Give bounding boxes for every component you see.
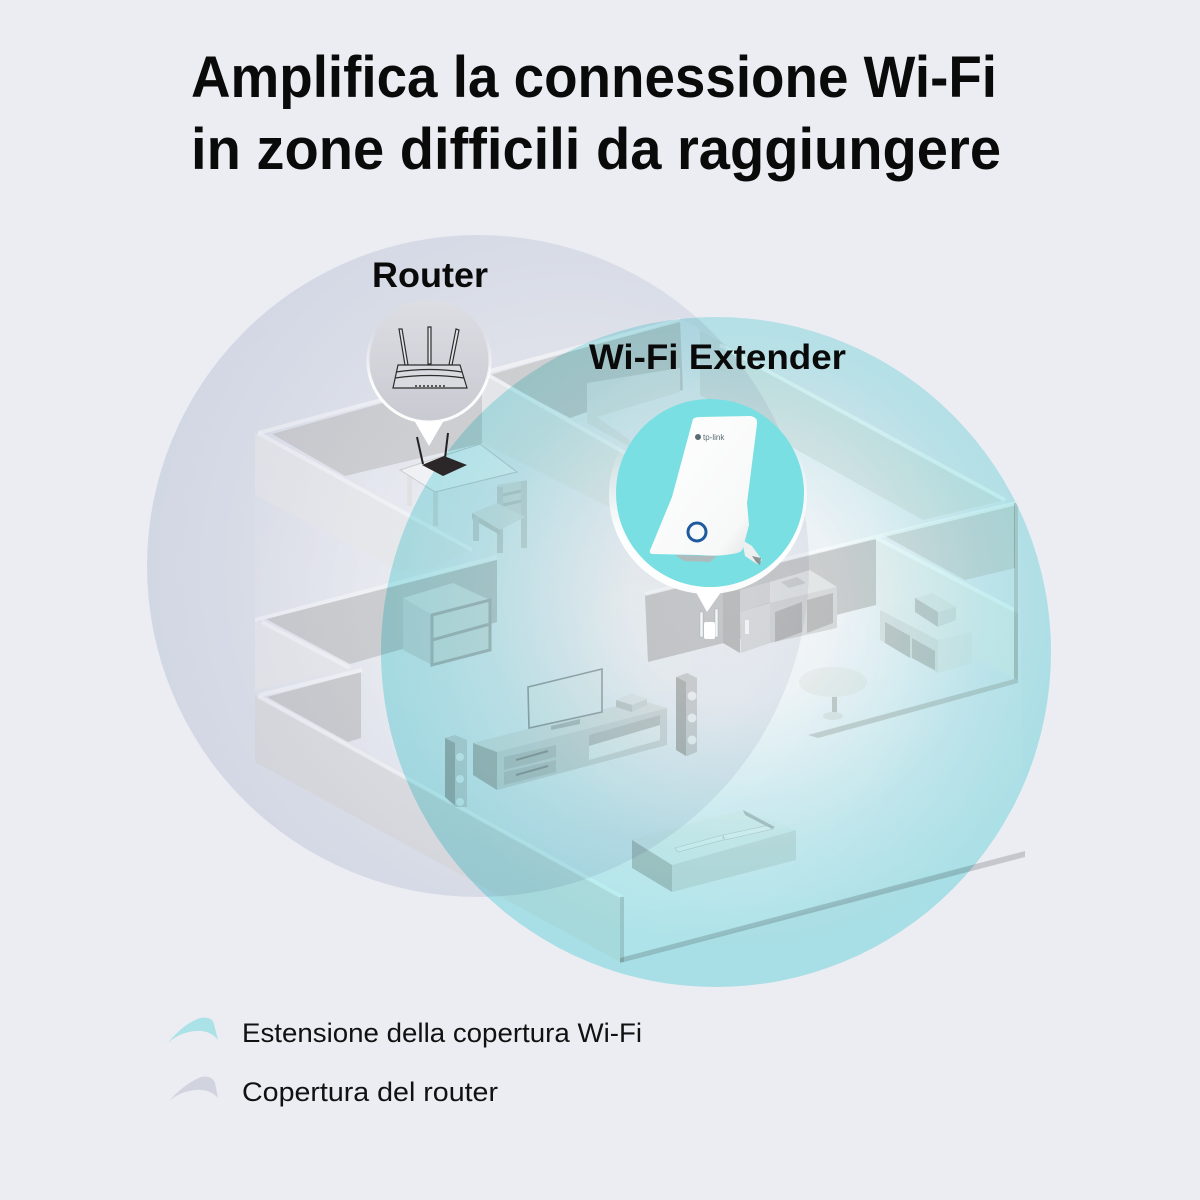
right speaker	[676, 673, 697, 756]
left speaker	[445, 735, 467, 807]
title: in zone difficili da raggiungere	[191, 117, 1001, 182]
router coverage circle	[147, 235, 809, 897]
wall top edges	[255, 320, 1018, 897]
icon: wifi extender plug: tp-link	[703, 433, 725, 442]
small extender device	[700, 609, 718, 639]
extender label: Wi-Fi Extender	[589, 338, 846, 377]
icon: router coverage swatch	[169, 1077, 218, 1101]
sofa	[632, 810, 796, 892]
right counter with microwave	[880, 593, 972, 673]
floor surface	[402, 412, 886, 826]
media box	[616, 693, 647, 712]
router label: Router	[372, 256, 488, 295]
floor plan	[255, 318, 1025, 962]
legend text: extender: Estensione della copertura Wi-Fi	[242, 1018, 642, 1048]
desk with router	[400, 444, 517, 526]
legend text: router: Copertura del router	[242, 1077, 498, 1107]
chair	[472, 480, 527, 553]
kitchen fridge	[723, 590, 770, 653]
legend	[168, 1018, 642, 1107]
title	[191, 45, 1001, 182]
extender callout	[609, 396, 807, 612]
kitchen counter	[740, 570, 837, 643]
router callout	[368, 300, 490, 446]
floor edge line	[620, 851, 1025, 963]
walls	[255, 320, 1018, 962]
icon: wifi extender plug	[650, 416, 762, 565]
extender coverage circle	[381, 317, 1051, 987]
bottom right skirting	[620, 503, 1018, 962]
bedside cabinet	[403, 583, 490, 665]
television	[528, 669, 602, 730]
round table	[799, 667, 867, 720]
icon: extender coverage swatch	[168, 1018, 218, 1043]
title: Amplifica la connessione Wi-Fi	[191, 45, 997, 110]
router device	[417, 433, 467, 476]
tv unit	[473, 700, 667, 790]
icon: router line drawing	[393, 327, 467, 388]
